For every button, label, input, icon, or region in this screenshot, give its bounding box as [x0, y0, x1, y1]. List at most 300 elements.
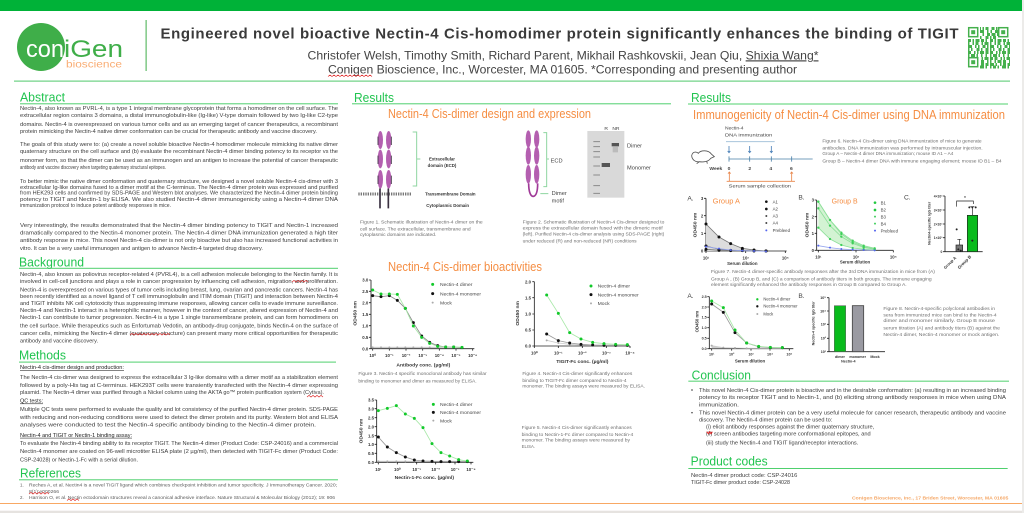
y tick labels: 2.5: [702, 295, 707, 299]
conclusion rule: [688, 381, 1009, 382]
y tick labels: 2: [701, 213, 704, 218]
methods text: QC tests:: [20, 398, 43, 404]
conclusion text: (ii) screen antibodies targeting more conformational epitopes, and: [706, 431, 871, 437]
conclusion text: potency to its receptor TIGIT and to Nectin-1, and (b) eliciting strong antibody responses in mice when using DNA: [699, 395, 1006, 401]
x tick labels: 10³: [743, 255, 749, 260]
panel: bioactivities: [353, 260, 645, 481]
conclusion text: immunization.: [699, 402, 739, 408]
x tick labels: [815, 255, 897, 260]
references list: 1.: [20, 482, 24, 488]
timeline labels: Nectin-4: [725, 125, 744, 131]
x tick labels: 10⁻⁴: [625, 350, 635, 355]
bottom orange rule: [0, 503, 1022, 504]
figure 5 caption: [522, 425, 634, 449]
logo: Conigen Bioscience: iGen: [64, 36, 123, 63]
footer address: Conigen Bioscience, Inc., 17 Briden Street, Worcester, MA 01605: [852, 495, 1009, 500]
dimer motif U linker: [529, 183, 538, 196]
down arrows: [728, 146, 773, 153]
panel: results immunogenicity: [687, 91, 1008, 363]
abstract text: Nectin-4, also known as PVRL-4, is a type 1 integral membrane glycoprotein that forms a homodimer on the cell surface. The: [20, 106, 338, 112]
abstract text: extracellular region contains 3 domains, a distal immunoglobulin-like (Ig-like) V-type domain followed by two Ig-like C2-type: [20, 113, 338, 119]
background rule: [19, 268, 338, 269]
series A2: [706, 246, 766, 251]
product codes text: [691, 473, 797, 486]
background text: Nectin-4 is overexpressed on various types of tumor cells including breast, lung, ovarian and pancreatic cancers. Nectin-4 has: [20, 288, 338, 294]
figure 3 caption: Figure 3. Nectin-4 specific monoclonal antibody has similar: [358, 371, 487, 376]
legend: B2: [881, 208, 887, 213]
y tick labels: 1: [701, 231, 704, 236]
y tick labels: 1×10³: [934, 236, 943, 240]
x tick labels: [375, 467, 476, 472]
figure 7 caption: Group A , (B) Group B, and (C) a comparison of antibody titers in both groups. The immune engaging: [711, 277, 932, 282]
figure 2 labels: ECD: [551, 158, 563, 164]
figure 2 caption: express the extracellular domain fused with the dimeric motif: [523, 225, 663, 230]
lobe dark accents: [378, 137, 391, 184]
axes: [375, 400, 473, 464]
chart: group B: [805, 198, 899, 264]
panel: references: [19, 467, 338, 500]
x tick labels: 10⁻¹: [385, 353, 394, 358]
error bars and significance bracket: [957, 201, 974, 245]
bar labels: Nectin-4: [841, 359, 857, 363]
x tick labels: [369, 353, 477, 358]
timeline axis: [729, 156, 813, 162]
y tick labels: 2×10³: [934, 222, 943, 226]
series: dimer: [712, 301, 782, 348]
abstract text: Very interestingly, the results demonstrated that the Nectin-4 dimer binding potency to TIGIT and Nectin-1 increased: [20, 223, 338, 229]
background text: cancer cells, mimicking the Nectin-4 dimer (quaternary structure) can present many more critical opportunities for therapeutic: [20, 331, 338, 337]
legend: Prebleed: [773, 228, 791, 233]
y tick labels: [702, 295, 707, 351]
figure 6 caption: Group A – Nectin-4 dimer DNA immunization; mouse ID A1 – A4: [822, 151, 954, 156]
affiliation: Conigen Bioscience, Inc., Worcester, MA 01605. *Corresponding and presenting author: [328, 62, 797, 76]
chart: antibody titers: [928, 194, 983, 270]
x tick labels: 10⁵: [890, 255, 897, 260]
axes: [827, 298, 885, 352]
legend: A2: [773, 207, 779, 212]
series A3: [706, 249, 766, 251]
axes: [943, 196, 983, 252]
series: monomer: [373, 296, 462, 348]
figure 6 caption: antibodies. DNA immunization was performed by intramuscular injection.: [822, 146, 983, 151]
ECD bracket: [413, 132, 420, 186]
axes: [815, 200, 893, 252]
series B3: [818, 208, 875, 249]
axes: [532, 282, 630, 348]
x axis title: TIGIT-Fc conc. (µg/ml): [556, 359, 609, 365]
legend: B3: [881, 214, 887, 219]
x tick labels: 10⁻⁴: [435, 353, 444, 358]
series: dimer: [547, 295, 627, 345]
background text: involved in cell-cell junctions and plays a role in cancer progression by influencing cell adhesion, migration, and proliferation.: [20, 279, 338, 285]
abstract text: The goals of this study were to: (a) create a novel soluble bioactive Nectin-4 homodimer molecule mimicking its native dimer: [20, 142, 338, 148]
y tick labels: 0.5: [362, 335, 369, 340]
bar labels: monomer: [849, 355, 867, 359]
QR code: [968, 27, 1010, 69]
y tick labels: 1.0: [702, 326, 707, 330]
y axis title: Nectin-4 specific IgG titer: [812, 301, 816, 345]
figure 2 caption: Figure 2. Schematic illustration of Nectin-4 Cis-dimer designed to: [523, 219, 665, 224]
group labels: [943, 254, 972, 270]
x tick labels: 10¹: [375, 467, 382, 472]
heading: References: References: [20, 467, 81, 481]
x tick labels: 10²: [729, 352, 735, 356]
y tick labels: 10⁴: [820, 309, 826, 313]
y tick labels: 3×10³: [934, 208, 943, 212]
figure 5 caption: binding to Nectin-1-Fc dimer compared to Nectin-4: [522, 432, 634, 437]
y tick labels: 3.0: [368, 406, 375, 411]
authors: Christofer Welsh, Timothy Smith, Richard Parent, Mikhail Rashkovskii, Jean Qiu, Shixia Wang*: [308, 48, 819, 62]
x axis title: Serum dilution: [727, 261, 758, 266]
legend: Prebleed: [881, 228, 899, 233]
bar labels: dimer: [835, 355, 846, 359]
gel labels: R: [604, 126, 608, 132]
y tick labels: 0.5: [702, 337, 707, 341]
figure 4 caption: binding to TIGIT-Fc dimer compared to Nectin-4: [522, 378, 627, 383]
conclusion text: This novel Nectin-4 Cis-dimer protein is bioactive and in the desirable conformation: (a) resulting in an increased binding: [699, 388, 1006, 394]
legend: Nectin-4 monomer: [598, 292, 639, 298]
x tick labels: 10⁻¹: [412, 467, 421, 472]
heading: Results: Results: [691, 91, 731, 105]
x axis title: Serum dilution: [735, 358, 765, 363]
product codes rule: [688, 468, 1008, 469]
legend: Nectin-4 dimer: [763, 297, 791, 302]
y tick labels: 2: [812, 214, 815, 219]
background text: [20, 272, 338, 344]
y tick labels: [934, 194, 943, 254]
y tick labels: 3: [812, 198, 815, 203]
y tick labels: 0.5: [525, 328, 532, 333]
y tick labels: 0.0: [368, 460, 375, 465]
heading: Results: Results: [354, 91, 394, 105]
y tick labels: 2.0: [362, 300, 369, 305]
legend: B4: [881, 221, 887, 226]
SDS-PAGE gel: [587, 131, 624, 198]
conclusion text: [691, 388, 1006, 446]
protein lobes: [378, 131, 391, 189]
methods text: CSP-24028) or Nectin-1-Fc with a serial dilution.: [20, 458, 138, 464]
membrane: [358, 189, 412, 198]
legend: Nectin-4 monomer: [440, 291, 481, 297]
series prebleed: [706, 247, 766, 251]
figure 3 caption: [358, 371, 487, 384]
y tick labels: [701, 196, 704, 254]
ECD bracket: [540, 133, 549, 194]
legend: Mock: [598, 301, 610, 307]
heading: Conclusion: Conclusion: [692, 368, 751, 382]
panel label B: B.: [798, 195, 805, 202]
abstract text: protein mimicking the Nectin-4 native dimer conformation can be crucial for therapeutic antibody and vaccine discovery.: [20, 129, 317, 135]
week labels: [709, 166, 793, 172]
figure 1 labels: Extracellular: [429, 156, 455, 161]
x tick labels: 10³: [748, 352, 754, 356]
gel labels: NR: [612, 126, 620, 132]
y tick labels: 10¹: [821, 350, 827, 354]
series: mock: [373, 346, 462, 349]
y tick labels: 3.5: [368, 398, 375, 403]
conclusion text: (i) elicit antibody responses against the dimer quaternary structure,: [706, 425, 875, 431]
legend: [874, 200, 899, 233]
figure 8 caption: Figure 8. Nectin-4-specific polyclonal antibodies in: [883, 306, 996, 311]
logo divider: [146, 20, 147, 71]
y axis title: OD450 nm: [805, 212, 811, 237]
y tick labels: 10³: [821, 323, 827, 327]
series prebleed: [818, 246, 875, 250]
x tick labels: 10¹: [815, 255, 822, 260]
background text: the cell surface. While therapeutics such as Enfortumab Vedotin, an antibody-drug conjugate, binds Nectin-4 on the surface of: [20, 324, 338, 330]
conclusion text: This novel Nectin-4 dimer protein can be a very useful molecule for cancer research, therapeutic antibody and vaccine: [699, 411, 1006, 417]
figure 8 caption: serum titration (A) and antibody titers (B) against the: [883, 326, 1001, 331]
references list: Harrison O, et al. Nectin ectodomain structures reveal a canonical adhesive interface. Nature Structural & Molecular Biology (2012); 19: 906: [29, 495, 336, 500]
figure 2 caption: under reduced (R) and non-reduced (NR) conditions: [523, 238, 637, 243]
legend: Nectin-4 monomer: [440, 410, 481, 416]
y tick labels: 2.5: [368, 415, 375, 420]
group B title: Group B: [832, 198, 858, 205]
legend: A1: [773, 199, 779, 204]
panel: background: [19, 256, 338, 344]
methods text: analyses were conducted to test the Nectin-4 specific antibody binding to the Nectin-4 dimer protein.: [20, 422, 317, 428]
area under curves: [706, 224, 766, 251]
y tick labels: 0.0: [362, 346, 369, 351]
gel labels: [604, 126, 651, 171]
y tick labels: 1.5: [368, 433, 375, 438]
immunization timeline: DNA immunization: [725, 132, 773, 138]
series B4: [818, 228, 875, 250]
figure 1 caption: cytoplasmic domains are indicated.: [360, 232, 436, 237]
week labels: 6: [790, 166, 793, 172]
x tick labels: 10⁻²: [402, 353, 411, 358]
product codes text: Nectin-4 dimer product code: CSP-24016: [691, 473, 797, 479]
references list: [20, 482, 337, 500]
chart: figure 3 antibody binding: [353, 278, 481, 369]
methods text: plasmid. The Nectin-4 dimer was purified through a Nickel column using the AKTA go™ protein purification system (Cytiva).: [20, 390, 324, 396]
figure 4 caption: monomer. The binding assays were measured by ELISA.: [522, 383, 645, 388]
spellcheck squiggle: [307, 395, 323, 397]
references list: 8(1):e000266: [29, 489, 60, 494]
abstract text: [20, 106, 338, 252]
figure 2 labels: Dimer: [552, 191, 567, 197]
legend: [431, 282, 481, 306]
series: dimer: [378, 406, 467, 461]
serum collection label: Serum sample collection: [729, 183, 791, 189]
methods text: To evaluate the Nectin-4 binding ability to its receptor TIGIT. The Nectin-4 dimer (Product Code: CSP-24016) and a commercial: [20, 441, 338, 447]
y tick labels: 2.0: [368, 424, 375, 429]
figure 5 caption: Figure 5. Nectin-4 Cis-dimer significantly enhances: [522, 425, 632, 430]
abstract text: antibody and vaccine discovery when targeting quaternary structural epitopes.: [20, 165, 166, 171]
stems: [380, 188, 388, 208]
abstract text: dramatically compared to the Nectin-4 monomer protein. The Nectin-4 dimer DNA immunization generated a high titer: [20, 230, 338, 236]
y tick labels: 10⁵: [820, 296, 826, 300]
figure 2 labels: [551, 158, 567, 204]
y tick labels: [362, 278, 369, 351]
title: Engineered novel bioactive Nectin-4 Cis-homodimer protein significantly enhances the binding of TIGIT: [160, 25, 959, 42]
y tick labels: 1.0: [525, 312, 532, 317]
figure 1 labels: Transmembrane Domain: [425, 191, 476, 196]
spellcheck squiggles: [130, 280, 308, 335]
chart: serum titration: [695, 295, 798, 363]
references list: 2.: [20, 495, 24, 500]
y tick labels: 2.5: [362, 289, 369, 294]
legend: [589, 284, 639, 307]
x tick labels: 10⁰: [531, 350, 538, 355]
y tick labels: [525, 279, 532, 349]
y tick labels: 1.5: [362, 312, 369, 317]
abstract text: antibody response in mice. This novel Nectin-4 cis-dimer is not only bioactive but also has increased functional activities in: [20, 238, 338, 244]
header: [14, 20, 1010, 82]
references rule: [19, 479, 338, 480]
background text: Nectin-4, also known as poliovirus receptor-related 4 (PVRL4), is a cell adhesion molecule belonging to the Nectin family. It is: [20, 272, 338, 278]
panel label C: C.: [904, 195, 911, 202]
series B2: [818, 202, 875, 249]
top green bar: [0, 0, 1024, 11]
week labels: 2: [748, 166, 751, 172]
references list: Reches A, et al. Nectin4 is a novel TIGIT ligand which combines checkpoint inhibition and tumor specificity. J Immunotherapy Cancer. 2020;: [29, 482, 337, 488]
figure 7 caption: element significantly enhanced the antibody responses in Group B compared to Group A.: [711, 282, 907, 287]
panel label B: B.: [798, 293, 805, 300]
series: mock: [547, 340, 627, 345]
icon: mouse: [692, 151, 714, 164]
abstract text: vitro. It can be a very useful immunogen and antigen to advance Nectin-4 targeted drug discovery.: [20, 246, 263, 252]
logo: Conigen Bioscience: [17, 23, 123, 71]
background text: antibody and vaccine discovery.: [20, 338, 98, 344]
heading: Background: Background: [19, 256, 84, 270]
group B bar: [967, 215, 978, 252]
legend: Mock: [440, 300, 452, 306]
figure 6 caption: Figure 6. Nectin-4 Cis-dimer using DNA immunization of mice to generate: [822, 138, 982, 143]
methods rule: [19, 362, 336, 363]
x axis title: Nectin-1-Fc conc. (µg/ml): [395, 475, 454, 481]
spellcheck squiggle: [707, 432, 712, 434]
y tick labels: 1.0: [362, 323, 369, 328]
abstract text: To better mimic the native dimer conformation and quaternary structure, we designed a novel soluble Nectin-4 cis-dimer with 3: [20, 179, 338, 185]
x tick labels: [703, 255, 789, 260]
figure 7 caption: Figure 7. Nectin-4 dimer-specific antibody responses after the 3rd DNA immunization in mice from (A): [711, 269, 936, 274]
gel labels: Monomer: [627, 165, 651, 171]
y tick labels: 0.5: [368, 451, 375, 456]
axes: [369, 280, 474, 351]
legend: Nectin-4 dimer: [440, 282, 473, 288]
figure 5 caption: ELISA.: [522, 444, 535, 449]
legend: Nectin-4 dimer: [440, 402, 473, 408]
week labels: 4: [769, 166, 772, 172]
background text: been recently identified as a novel ligand of T cell immunoglobulin and ITIM domain (TIGIT) and interaction between Nectin-4: [20, 294, 338, 300]
figure 4 caption: Figure 4. Nectin-4 Cis-dimer significantly enhances: [522, 371, 633, 376]
area between curves: [818, 202, 875, 250]
legend: A4: [773, 221, 779, 226]
serum collection arrows: [727, 172, 795, 181]
figure 6 caption: Group B – Nectin-4 dimer DNA with immune engaging element; mouse ID B1 – B4: [822, 158, 1002, 163]
figure 1 labels: Cytoplasmic Domain: [426, 203, 469, 208]
y tick labels: 0: [701, 249, 704, 254]
series: monomer: [378, 437, 467, 462]
chart: group A: [692, 196, 791, 266]
legend: Nectin-4 monomer: [763, 304, 798, 309]
background text: Nectin-1 can contribute to tumor progression. Nectin-4 is a type 1 single transmembrane protein, and can form homodimers on: [20, 315, 338, 321]
figure 3 caption: binding to monomer and dimer as measured by ELISA.: [358, 379, 477, 384]
figure 2 caption: (left). Purified Nectin-4 cis-dimer analysis using SDS-PAGE (right): [523, 232, 665, 237]
abstract text: monomer form, so that the dimer can be used as an immunogen and an antigen to increase the potential of cancer therapeutic: [20, 158, 338, 164]
chart: figure 4 TIGIT binding: [515, 279, 639, 365]
abstract text: from HEK293 cells and confirmed by SDS-PAGE and Western blot analyses. We characterized the Nectin-4 dimer protein binding: [20, 191, 338, 197]
figure 8 caption: dimer and monomer similarly. Group B mouse: [883, 318, 996, 323]
heading: Product codes: Product codes: [691, 454, 768, 468]
y axis title: OD450 nm: [515, 300, 521, 326]
figure 1 caption: cell surface. The extracellular, transmembrane and: [360, 226, 471, 231]
x tick labels: 10⁻³: [418, 353, 427, 358]
lobes: [526, 130, 539, 184]
immunization span: [726, 140, 775, 143]
header rule: [14, 81, 1010, 82]
methods text: [19, 365, 338, 464]
x tick labels: 10⁻⁴: [466, 467, 476, 472]
figure 8 caption: Nectin-4 dimer, Nectin-4 monomer or mock antigen.: [883, 332, 999, 337]
series: monomer: [712, 304, 782, 348]
series: mock: [378, 460, 467, 463]
methods text: Multiple QC tests were performed to evaluate the quality and lot consistency of the purified Nectin-4 dimer protein. SDS-PAGE: [20, 407, 338, 413]
figure 5 caption: monomer. The binding assays were measured by: [522, 438, 631, 443]
conclusion text: discovery. The Nectin-4 dimer protein can be used to:: [699, 417, 833, 423]
figure 2 caption: [523, 219, 665, 243]
abstract text: quaternary structure on the cell surface and (b) evaluate the recombinant Nectin-4 dimer binding potency to its receptor vs the: [20, 149, 338, 155]
bar labels: [835, 355, 881, 363]
y tick labels: 3: [701, 196, 704, 201]
background text: and TIGIT inhibits NK cell cytotoxicity thus suppressing immune responses, allowing cancer cells to evade immune surveillance.: [20, 301, 338, 307]
x tick labels: 10⁻²: [578, 350, 587, 355]
logo: Conigen Bioscience: bioscience: [66, 60, 123, 70]
panel: conclusion and product codes: [688, 368, 1009, 500]
x tick labels: 10³: [853, 255, 860, 260]
subtitle: design and expression: Nectin-4 Cis-dimer design and expression: [388, 107, 591, 121]
x axis title: Antibody conc. (µg/ml): [396, 363, 451, 369]
methods text: with reducing and non-reducing conditions were used to detect the dimer protein and its purity. Western blot and ELISA: [19, 415, 338, 421]
x tick labels: 10⁰: [394, 467, 401, 472]
logo: Conigen Bioscience: con: [26, 36, 64, 63]
y axis title: OD450 nm: [353, 300, 359, 326]
y tick labels: 10²: [821, 337, 827, 341]
methods text: The Nectin-4 cis-dimer was designed to express the extracellular 3 Ig-like domains with a dimer motif as a stabilization element: [20, 375, 338, 381]
y tick labels: [368, 398, 375, 465]
legend: [756, 297, 798, 316]
abstract text: potency to TIGIT and Nectin-1 by ELISA. We also studied Nectin-4 dimer immunogenicity using a Nectin-4 dimer DNA: [20, 197, 338, 203]
figure 1 caption: Figure 1. Schematic illustration of Nectin-4 dimer on the: [360, 219, 483, 224]
y tick labels: 0.0: [702, 347, 707, 351]
abstract text: domains. Nectin-4 is overexpressed on various tumor cells and as an emerging target of cancer therapeutics, a recombinant: [20, 122, 338, 128]
legend: A3: [773, 214, 779, 219]
series A1: [706, 224, 766, 251]
y tick labels: [812, 198, 815, 253]
abstract text: extracellular Ig-like domains fused to a dimer motif at the C-terminus. The Nectin-4 dimer protein was expressed and purified: [20, 185, 338, 191]
data points: [956, 206, 977, 252]
background text: Nectin-4 and Nectin-1 interact in a heterophilic manner, however in the context of cancer, altered expression of Nectin-4 and: [20, 308, 338, 314]
chart: figure 5 Nectin-1 binding: [358, 398, 481, 481]
product codes text: TIGIT-Fc dimer product code: CSP-24028: [691, 480, 790, 486]
panel: methods: [19, 348, 338, 464]
results rule: [352, 103, 671, 104]
methods text: followed by a poly-His tag at C-terminus. HEK293T cells were transiently transfected with the Nectin-4 dimer expressing: [20, 383, 338, 389]
panel label A: A.: [687, 195, 694, 202]
y tick labels: 3.0: [362, 278, 369, 283]
legend: Mock: [440, 418, 452, 424]
x axis title: Serum dilution: [840, 259, 870, 264]
x tick labels: [709, 352, 793, 356]
y tick labels: 4×10³: [934, 194, 943, 198]
x tick labels: 10⁵: [782, 255, 789, 260]
y tick labels: 1.0: [368, 442, 375, 447]
panel: results design and expression: [352, 91, 671, 243]
x tick labels: 10⁻¹: [554, 350, 563, 355]
x tick labels: 10⁰: [369, 353, 376, 358]
monomer bar: [852, 306, 864, 352]
